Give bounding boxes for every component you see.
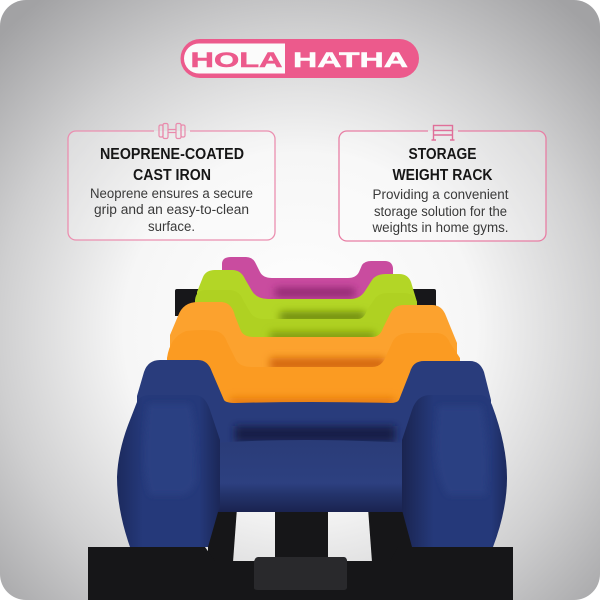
rack back rail [175, 289, 436, 316]
text: neoprene description: surface. [148, 219, 195, 234]
icon: dumbbell [159, 124, 185, 138]
text: neoprene description: grip and an easy-to-clean [94, 202, 249, 217]
pink dumbbell [222, 257, 393, 302]
orange dumbbell back [170, 302, 457, 375]
logo: Hola Hatha: HATHA [293, 49, 408, 72]
logo: Hola Hatha [180, 39, 419, 78]
panel: neoprene-coated cast iron [68, 124, 275, 240]
heading: storage weight rack: WEIGHT RACK [392, 167, 493, 184]
text: storage description: Providing a convenient [372, 187, 509, 202]
heading: neoprene-coated cast iron: CAST IRON [133, 167, 211, 184]
rack tab [254, 557, 347, 590]
text: storage description: storage solution for the [374, 204, 507, 219]
panel: storage weight rack [339, 126, 546, 241]
heading: neoprene-coated cast iron [100, 146, 244, 184]
photo: dumbbells on rack [88, 257, 513, 600]
green dumbbell back [197, 270, 417, 325]
text: storage description: weights in home gyms. [372, 220, 508, 235]
heading: neoprene-coated cast iron: NEOPRENE-COATED [100, 146, 244, 163]
heading: storage weight rack: STORAGE [408, 146, 477, 163]
orange dumbbell front [167, 330, 460, 412]
navy dumbbell back [137, 360, 491, 450]
icon: weight rack [432, 126, 454, 140]
navy dumbbell front [117, 395, 507, 547]
text: neoprene description [90, 186, 253, 234]
rack lower frame [88, 508, 513, 600]
logo: Hola Hatha: HOLA [190, 49, 282, 72]
text: neoprene description: Neoprene ensures a secure [90, 186, 253, 201]
green dumbbell front [195, 290, 417, 345]
text: storage description [372, 187, 509, 235]
heading: storage weight rack [392, 146, 493, 184]
